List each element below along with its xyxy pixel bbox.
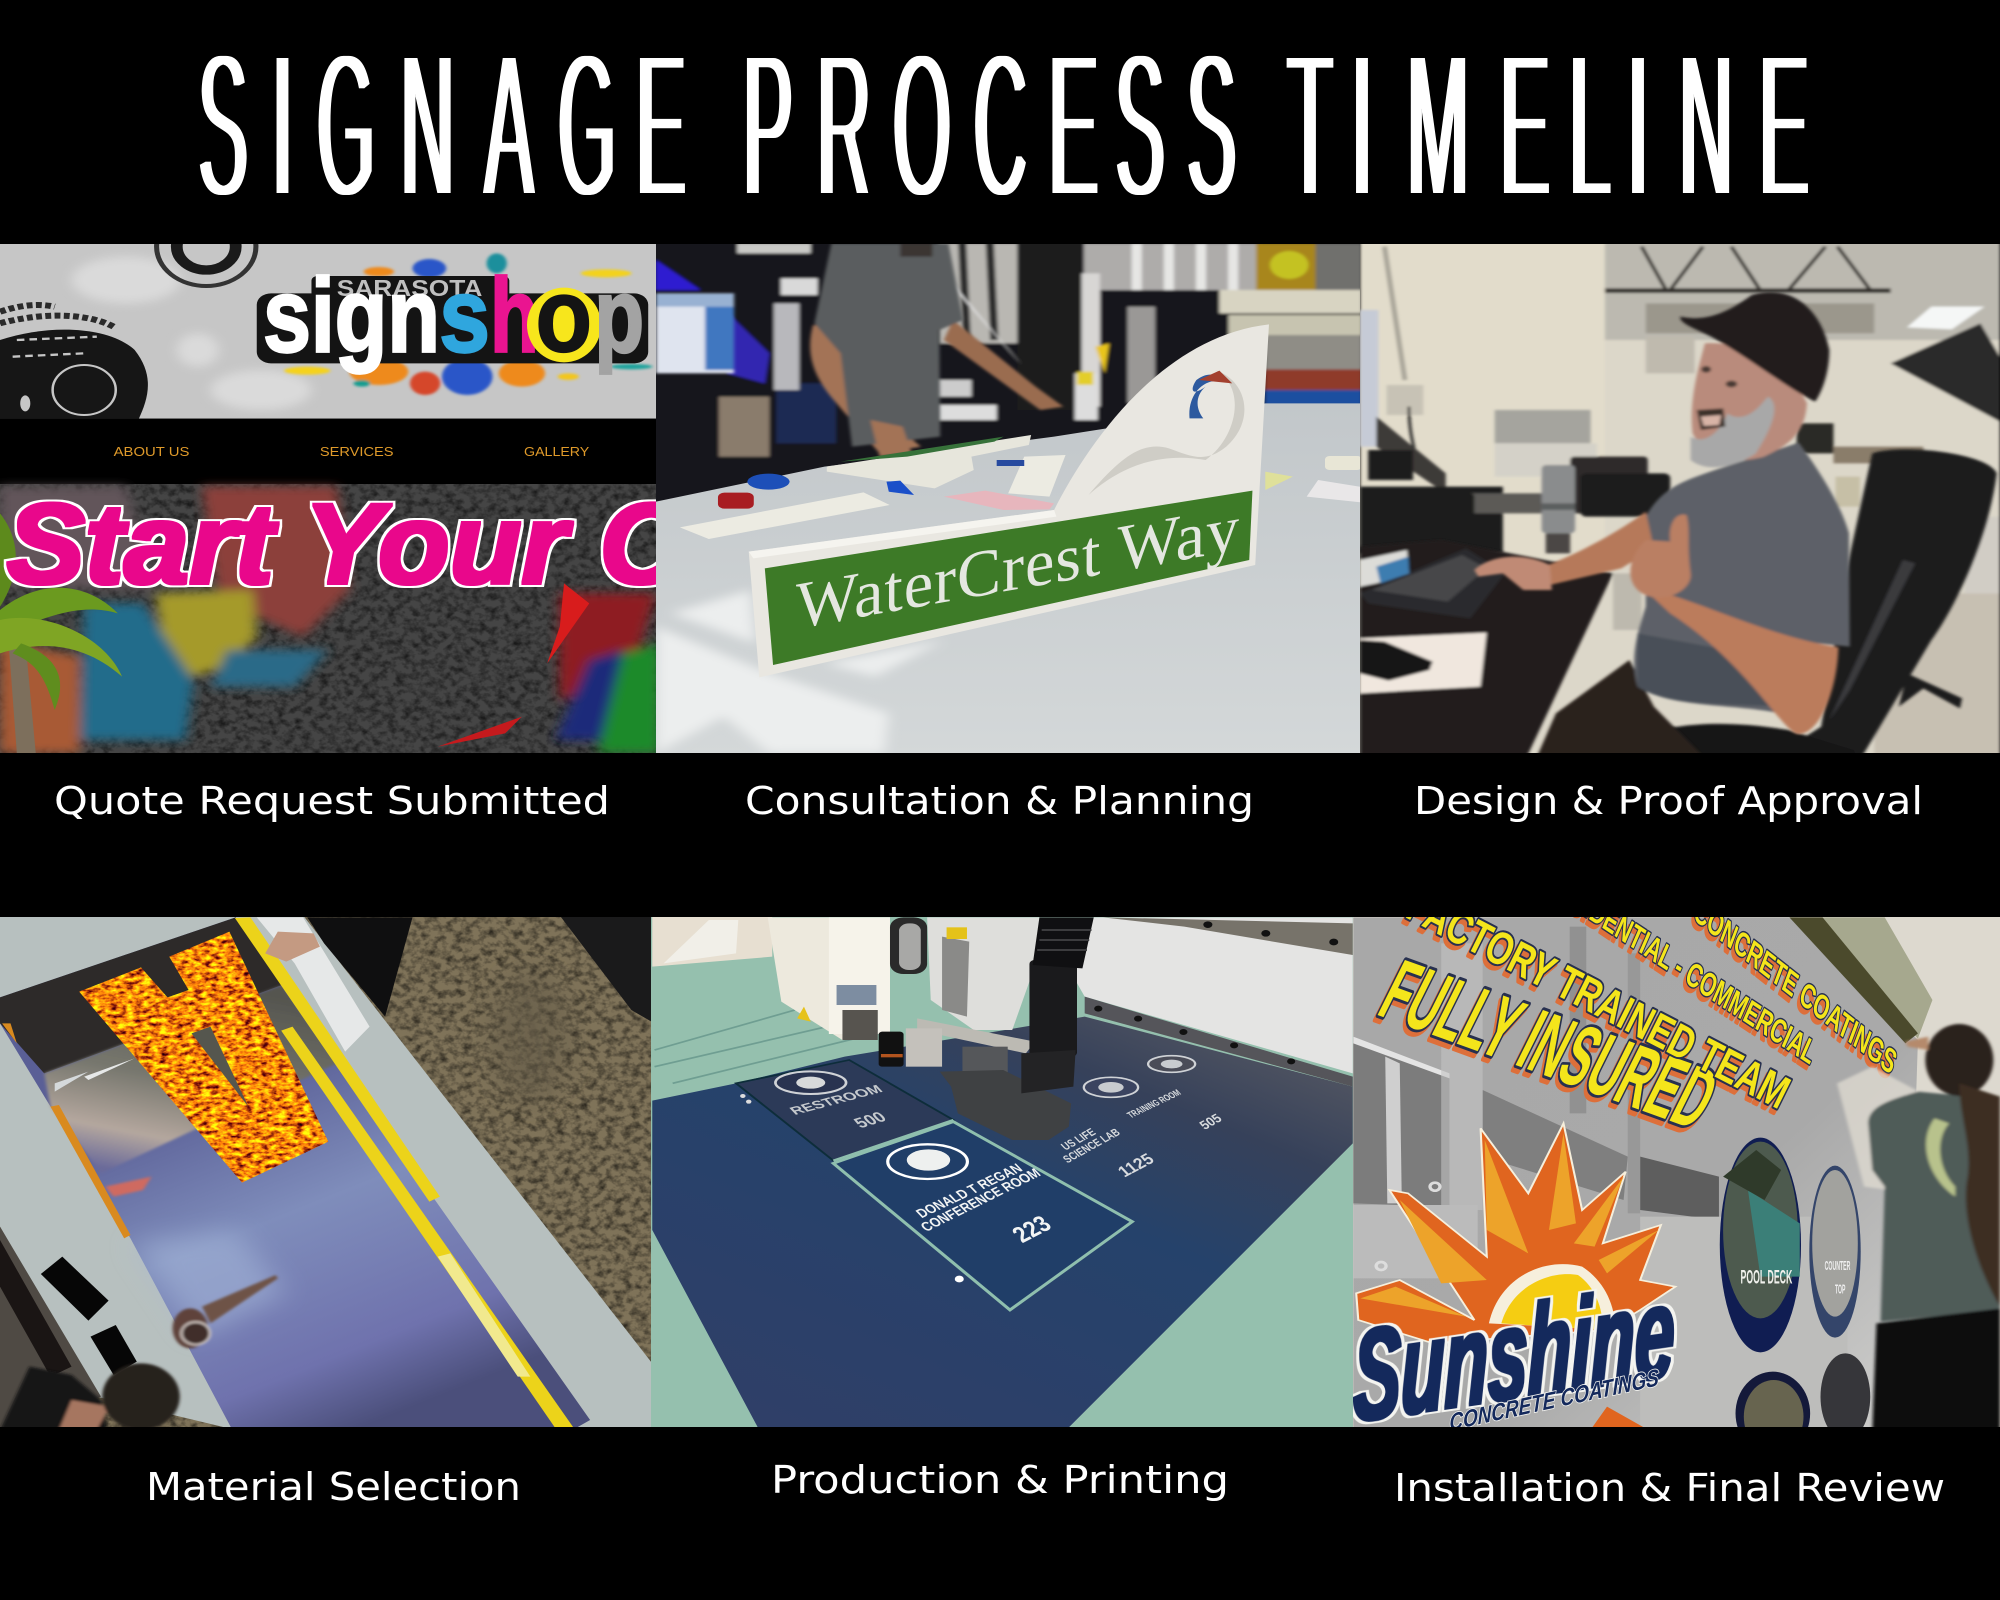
pale reflection on panel [135, 1230, 286, 1337]
workshop background [650, 240, 1370, 507]
panel: production and printing photo [650, 910, 1360, 1430]
further engraved signs: SCIENCE LAB [1060, 1126, 1123, 1165]
palm tree [0, 513, 122, 753]
service circles [1720, 1138, 1870, 1455]
further engraved signs: US LIFE [1058, 1125, 1098, 1153]
caption: installation and final review: Installation & Final Review [1394, 1466, 1945, 1510]
building windows in wrap [1353, 927, 1847, 1430]
engraved panel: restroom [736, 1060, 953, 1161]
navigation bar: ABOUT US [114, 445, 189, 460]
engraved panel: conference room: CONFERENCE ROOM [918, 1166, 1044, 1235]
man at table [810, 243, 1063, 457]
aeroplane engine on graphic [173, 1275, 278, 1348]
further engraved signs [1058, 1056, 1225, 1180]
gantry and rails [1039, 917, 1353, 1087]
panel: consultation and planning photo [650, 240, 1370, 760]
man giving thumbs up [1474, 292, 1850, 760]
logo: Sarasota Sign Shop: h [490, 258, 539, 374]
logo: Sarasota Sign Shop: SARASOTA [337, 277, 482, 301]
engraved panel: restroom: 500 [850, 1108, 891, 1131]
further engraved signs: TRAINING ROOM [1125, 1088, 1184, 1120]
WaterCrest Way sign [749, 324, 1269, 677]
green nameplate [765, 491, 1252, 665]
wrap text lines [1366, 864, 1901, 1147]
truck roof edge [1789, 917, 1932, 1038]
monitor [656, 293, 734, 373]
phones on table [41, 1257, 137, 1375]
engraved panel: conference room: 223 [1006, 1210, 1057, 1247]
office room background [1360, 240, 2000, 760]
office chair [1605, 449, 1997, 760]
caption: production and printing: Production & Printing [771, 1458, 1229, 1502]
tools on table [680, 435, 1370, 539]
service circles: COUNTER [1825, 1258, 1850, 1274]
face and beard [1692, 343, 1807, 460]
grey highway band on panel [44, 985, 337, 1173]
truck side with building wrap [1353, 917, 1918, 1430]
engraved panel: conference room: DONALD T REGAN [913, 1161, 1026, 1221]
white machine housing [768, 917, 1039, 1040]
navigation bar [0, 418, 656, 456]
cutter head and hose [879, 917, 1094, 1140]
installer [1837, 1024, 2000, 1430]
grey t-shirt [1634, 443, 1850, 723]
raised forearm [1540, 512, 1654, 585]
paint splatter [284, 253, 652, 395]
monitor, printer, clutter [1360, 247, 1923, 553]
sun logo [1356, 1123, 1675, 1343]
caption: material selection: Material Selection [146, 1465, 521, 1509]
website header band [0, 244, 656, 419]
grey work table [0, 910, 660, 1430]
flame letter [79, 932, 328, 1183]
service circles: TOP [1835, 1282, 1845, 1297]
navigation bar: SERVICES [320, 445, 394, 460]
caption: quote request submitted: Quote Request Submitted [54, 779, 610, 823]
title: SIGNAGE PROCESS TIMELINE [198, 11, 1809, 240]
printed graphic panel [0, 917, 590, 1430]
Sunshine wordmark [1353, 1258, 1675, 1450]
navy sign blank [652, 1017, 1353, 1427]
panel: installation and final review photo [1350, 864, 2000, 1455]
logo: Sarasota Sign Shop: sign [263, 258, 440, 374]
black cap [1680, 292, 1829, 402]
table light patches [656, 590, 944, 753]
dark slit in letter [192, 1027, 248, 1107]
logo: Sarasota Sign Shop: s [439, 258, 490, 374]
yellow rulers [235, 917, 573, 1427]
navigation bar: GALLERY [524, 445, 590, 460]
dark top of graphic [0, 917, 282, 1073]
Sunshine wordmark: CONCRETE COATINGS [1449, 1363, 1659, 1436]
mint cutting bed [650, 910, 1360, 1430]
concrete floor [0, 910, 660, 1430]
dark floor under table [0, 1227, 101, 1430]
panel: quote request website screenshot [0, 244, 656, 753]
wave cutout [1089, 370, 1244, 495]
service circles: POOL DECK [1740, 1266, 1792, 1288]
logo: Sarasota Sign Shop: o [535, 258, 592, 374]
white liner sheet [257, 917, 370, 1052]
machine corner [556, 910, 660, 1027]
hands [1474, 557, 1552, 590]
caption: design and proof approval: Design & Proof Approval [1414, 779, 1923, 823]
person at bottom left [0, 1363, 180, 1430]
further engraved signs: 1125 [1113, 1150, 1158, 1180]
hero: painted brick wall [0, 479, 691, 760]
desk with keyboard and paper [1360, 540, 1642, 760]
person's hand and torso top [265, 917, 412, 1017]
caption: consultation and planning: Consultation & Planning [745, 779, 1254, 823]
work table [650, 403, 1370, 760]
panel: material selection photo [0, 910, 660, 1430]
WaterCrest Way sign: WaterCrest Way [796, 491, 1240, 643]
engraved panel: restroom: RESTROOM [786, 1082, 886, 1117]
panel: design and proof approval photo [1360, 240, 2000, 760]
logo: Sarasota Sign Shop: p [594, 258, 644, 374]
engraved panel: conference room [833, 1122, 1132, 1310]
logo: Sarasota Sign Shop [256, 274, 648, 375]
studio wall [1350, 910, 2000, 1430]
further engraved signs: 505 [1197, 1112, 1225, 1133]
flame edge strip [51, 1105, 130, 1238]
